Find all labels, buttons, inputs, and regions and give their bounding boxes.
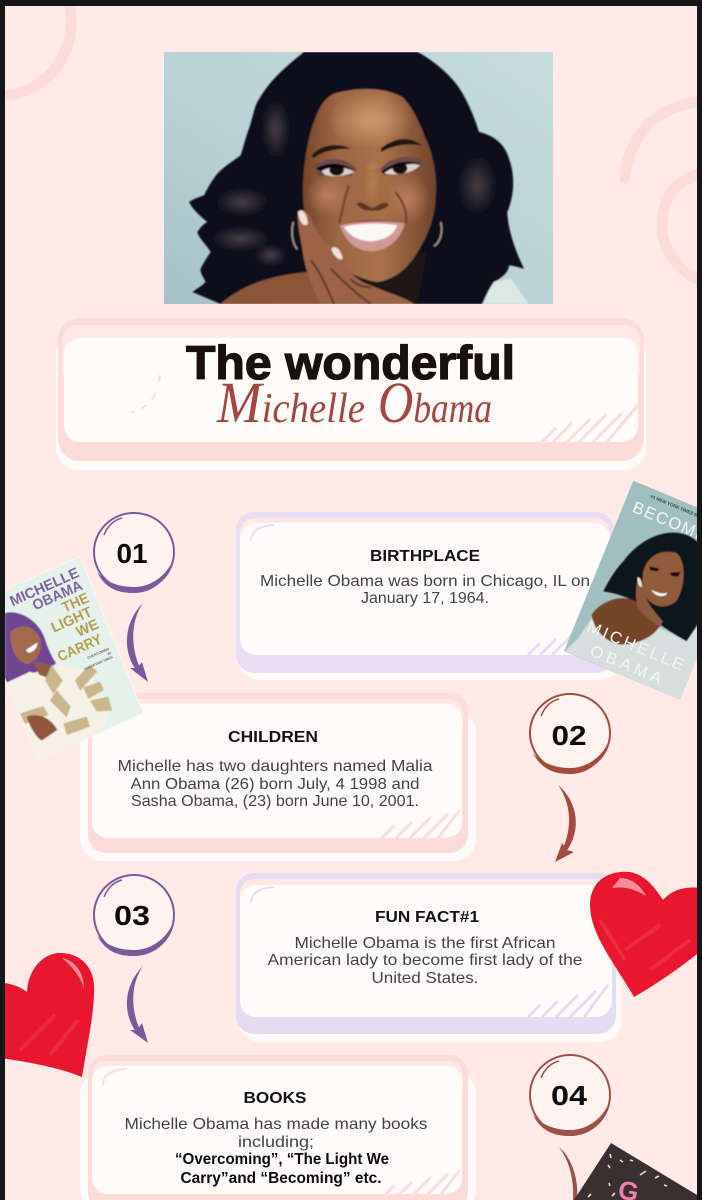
heading: BIRTHPLACE <box>370 548 480 565</box>
portrait photo <box>164 52 553 304</box>
face <box>303 89 436 282</box>
badge 03 <box>94 875 174 956</box>
cover text: CARRY <box>55 632 105 665</box>
hatch marks <box>541 405 638 443</box>
forehead light <box>334 97 408 146</box>
heading: BOOKS <box>244 1090 307 1107</box>
title name: Michelle <box>216 370 365 435</box>
title heading: The wonderful <box>186 336 515 389</box>
heart: left <box>0 953 94 1077</box>
body text: American lady to become first lady of the <box>268 952 583 969</box>
hairline <box>312 87 428 142</box>
body text: United States. <box>372 970 478 987</box>
mouth <box>340 220 405 251</box>
heading: FUN FACT#1 <box>375 909 479 926</box>
body text <box>118 758 433 810</box>
eyebrows <box>311 139 422 158</box>
arrow 04 <box>559 1147 577 1200</box>
card: children <box>80 693 476 861</box>
cover text: UNCERTAIN TIMES <box>84 655 114 671</box>
confetti <box>588 1154 667 1197</box>
eyeshadow <box>315 157 423 176</box>
cover text: OBAMA <box>587 642 664 688</box>
decorative arc: top left <box>5 8 71 95</box>
arrow 02 to fun fact <box>555 785 576 862</box>
card: fun fact <box>236 873 622 1042</box>
sparkle marks <box>131 375 160 413</box>
cover text: IN <box>107 651 112 656</box>
nose <box>364 168 382 202</box>
cover text: MICHELLE <box>584 618 686 674</box>
decorative arcs: top right <box>625 102 702 282</box>
body text: January 17, 1964. <box>361 590 489 607</box>
card: books <box>80 1055 476 1200</box>
badge 04: 04 <box>551 1080 587 1111</box>
body text: Sasha Obama, (23) born June 10, 2001. <box>131 793 419 810</box>
cover portrait <box>565 533 700 701</box>
cover text: LIGHT <box>49 604 95 636</box>
eyes <box>321 164 420 176</box>
title panel <box>56 318 646 470</box>
badge 02: 02 <box>552 720 586 751</box>
cover text: OVERCOMING <box>87 647 110 660</box>
hand <box>298 210 414 304</box>
badge 03: 03 <box>114 900 150 931</box>
title name <box>216 370 492 435</box>
cover text: MICHELLE <box>8 565 82 610</box>
body text: including; <box>238 1134 314 1151</box>
badge 02 <box>530 694 610 774</box>
badge 01 <box>94 513 174 593</box>
body text: Michelle Obama is the first African <box>294 935 556 952</box>
cover text: WE <box>74 617 102 641</box>
body text <box>268 935 583 987</box>
badge 04 <box>530 1055 610 1136</box>
cover text <box>8 565 117 688</box>
body text <box>124 1116 428 1187</box>
badge 01: 01 <box>116 538 148 569</box>
cover text: THE <box>60 590 92 616</box>
cover figure <box>5 612 112 760</box>
body text: Ann Obama (26) born July, 4 1998 and <box>130 776 420 793</box>
body text: Carry”and “Becoming” etc. <box>180 1170 382 1187</box>
heading: CHILDREN <box>228 729 318 746</box>
body text <box>260 573 590 607</box>
hair highlights <box>211 99 497 267</box>
cover text <box>573 489 702 694</box>
body text: Michelle has two daughters named Malia <box>118 758 433 775</box>
card: birthplace <box>236 512 622 680</box>
earrings <box>292 222 442 249</box>
hair <box>189 52 524 304</box>
heart: right <box>590 872 702 997</box>
cover text: OBAMA <box>30 578 86 614</box>
book cover: Becoming <box>564 481 702 701</box>
arrow 03 to books <box>127 966 148 1043</box>
arrow 01 to children <box>127 603 148 682</box>
cheek light <box>309 163 428 220</box>
book cover: The Light We Carry <box>0 557 143 760</box>
neck shadow <box>362 252 428 304</box>
white shirt <box>481 279 529 304</box>
shoulder <box>221 272 327 304</box>
smile crease <box>339 185 406 224</box>
body text: Michelle Obama has made many books <box>124 1116 428 1133</box>
body text: Michelle Obama was born in Chicago, IL on <box>260 573 590 590</box>
title name: Obama <box>378 370 492 435</box>
body text: “Overcoming”, “The Light We <box>175 1151 389 1168</box>
book cover: Gift (cropped) <box>574 1143 702 1200</box>
